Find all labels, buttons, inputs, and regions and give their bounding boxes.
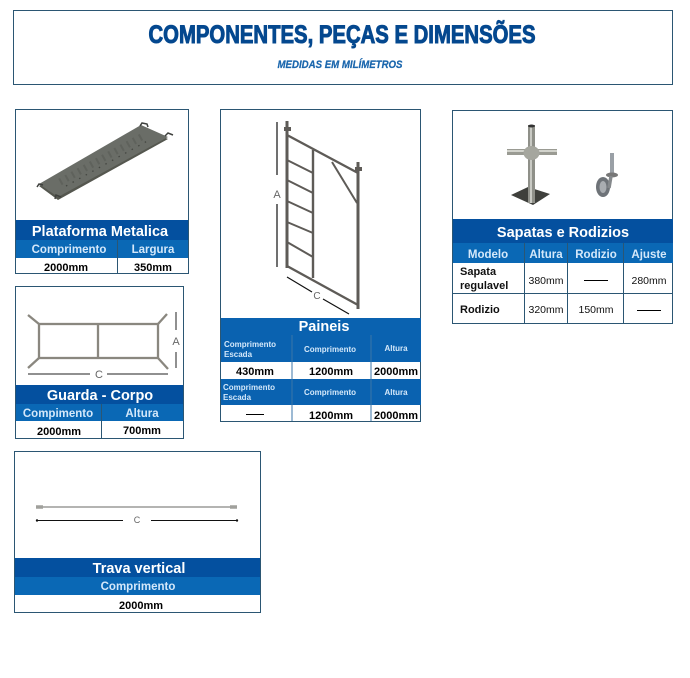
panel: guarda-corpo: Compimento — [23, 408, 93, 420]
subtitle: MEDIDAS EM MILÍMETROS — [278, 58, 403, 71]
panel: sapatas e rodizios: 320mm — [528, 304, 564, 316]
row: sapata regulavel: regulavel — [460, 280, 508, 292]
panel: plataforma metalica: Comprimento — [32, 244, 106, 256]
dimension marks: A — [172, 336, 180, 348]
icon: caster wheel — [596, 153, 618, 197]
header row — [453, 243, 673, 263]
panel: sapatas e rodizios: 380mm — [528, 275, 564, 287]
dimension marks: A — [273, 189, 281, 201]
panel: guarda-corpo: Guarda - Corpo — [47, 388, 153, 404]
panel: guarda-corpo: Altura — [125, 408, 159, 420]
panel: trava vertical — [14, 452, 260, 612]
panel: sapatas e rodizios — [452, 110, 673, 324]
dimension marks: C — [313, 291, 321, 302]
row: rodizio: Rodizio — [460, 304, 500, 316]
panel: paineis: Altura — [384, 388, 408, 397]
dimension mark: C — [134, 515, 141, 525]
dimension marks — [28, 312, 180, 381]
panel: paineis: Altura — [384, 344, 408, 353]
panel: paineis: 1200mm — [309, 410, 353, 422]
dimension marks — [273, 122, 349, 314]
panel: guarda-corpo — [16, 286, 184, 438]
panel: sapatas e rodizios: 150mm — [578, 304, 614, 316]
panel: paineis — [220, 110, 421, 422]
header row 2 — [221, 379, 421, 405]
panel: plataforma metalica: Plataforma Metalica — [32, 224, 169, 240]
panel: sapatas e rodizios: Altura — [529, 249, 563, 261]
value row 1: 430mm — [236, 366, 274, 378]
header panel — [14, 10, 672, 84]
title band — [16, 220, 188, 240]
panel: paineis: 2000mm — [374, 366, 418, 378]
value row: 2000mm — [119, 600, 163, 612]
panel: sapatas e rodizios: 280mm — [631, 275, 667, 287]
value row 2 — [246, 414, 264, 416]
panel: paineis: Escada — [223, 393, 252, 402]
row: sapata regulavel: Sapata — [460, 266, 497, 278]
panel: trava vertical: Trava vertical — [93, 561, 185, 577]
panel: sapatas e rodizios: Ajuste — [631, 249, 667, 261]
panel: sapatas e rodizios: Rodizio — [575, 249, 617, 261]
icon: ladder frame — [284, 121, 362, 309]
dimension marks: C — [95, 369, 103, 381]
header row — [16, 404, 183, 421]
panel: guarda-corpo: 700mm — [123, 425, 161, 437]
value row: 2000mm — [44, 262, 88, 274]
icon: brace bar — [36, 506, 237, 508]
value row: 2000mm — [37, 426, 81, 438]
title band — [453, 219, 673, 243]
header row — [16, 240, 188, 258]
icon: guard rail frame — [28, 314, 168, 369]
header row 1 — [221, 335, 421, 362]
header row — [15, 577, 260, 595]
panel: paineis: 1200mm — [309, 366, 353, 378]
icon: metal platform — [37, 123, 173, 200]
panel: sapatas e rodizios: Sapatas e Rodizios — [497, 225, 629, 241]
panel: plataforma metalica: Largura — [132, 244, 175, 256]
panel: paineis: 2000mm — [374, 410, 418, 422]
panel: paineis: Escada — [224, 350, 253, 359]
icon: adjustable base — [507, 124, 557, 205]
panel: plataforma metalica — [16, 110, 188, 274]
title band — [16, 385, 183, 404]
title: COMPONENTES, PEÇAS E DIMENSÕES — [148, 19, 536, 49]
panel: plataforma metalica: 350mm — [134, 262, 172, 274]
title band — [15, 558, 260, 577]
panel: paineis: Comprimento — [223, 383, 275, 392]
title band — [221, 318, 421, 335]
panel: trava vertical: Comprimento — [101, 581, 175, 593]
panel: paineis: Comprimento — [304, 388, 356, 397]
panel: paineis: Paineis — [299, 319, 349, 335]
panel: paineis: Comprimento — [224, 340, 276, 349]
panel: sapatas e rodizios: Modelo — [468, 249, 508, 261]
panel: paineis: Comprimento — [304, 345, 356, 354]
